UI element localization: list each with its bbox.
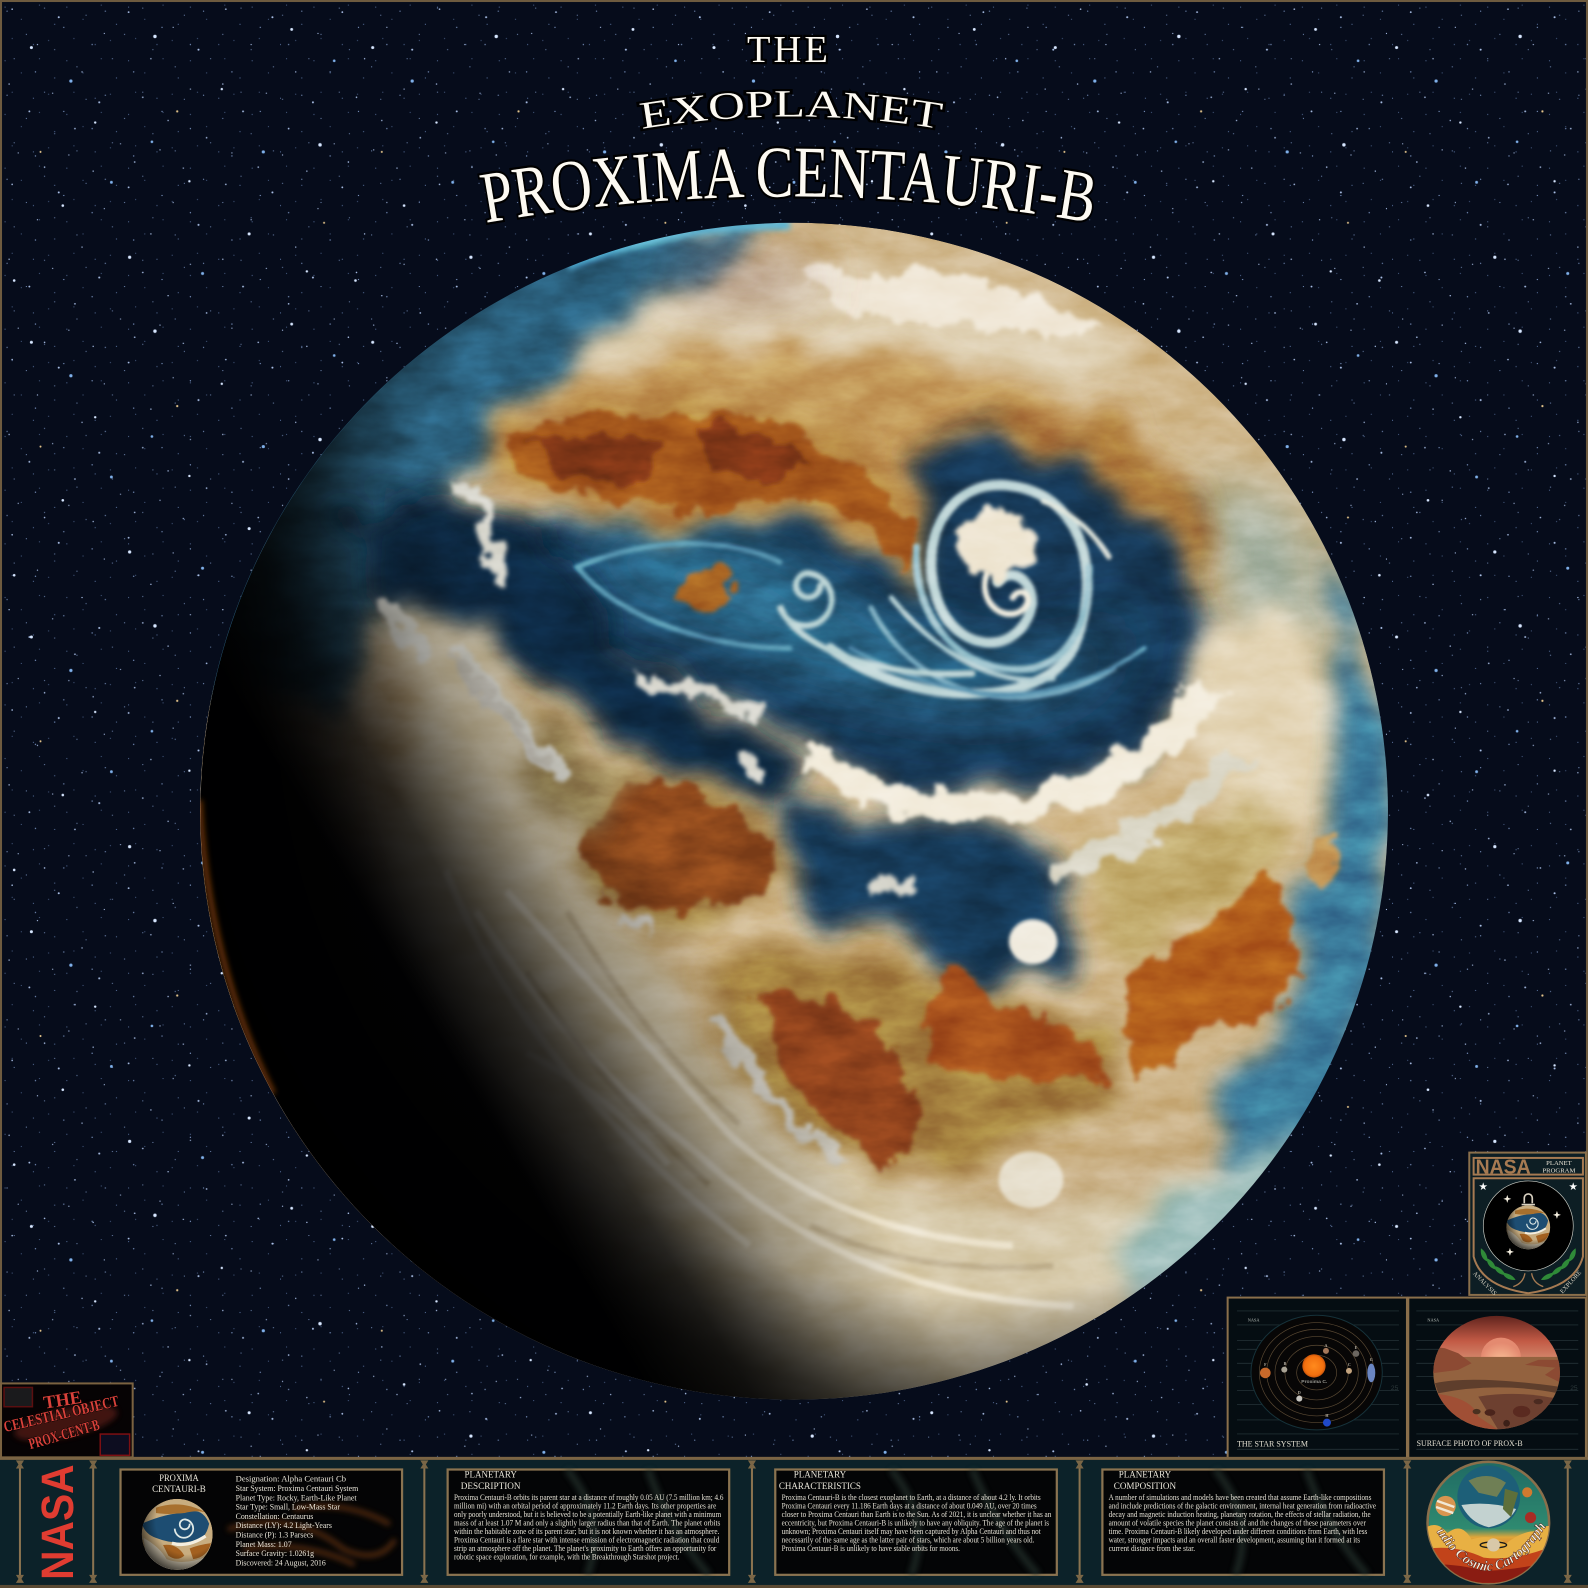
badge astronaut xyxy=(1522,1194,1535,1205)
title: THE: THE xyxy=(747,29,831,71)
panel: planetary composition xyxy=(1102,1470,1384,1575)
composition heading: COMPOSITION xyxy=(1114,1481,1176,1492)
mission badge: ★ xyxy=(1568,1182,1578,1193)
planet: east land xyxy=(1124,871,1298,1084)
panel: planetary characteristics xyxy=(775,1470,1057,1575)
celestial heading: THE xyxy=(42,1387,83,1413)
badge ANALYSIS: ANALYSIS xyxy=(1471,1270,1498,1297)
badge ribbon xyxy=(1513,1273,1543,1287)
description body: strip an atmosphere off the planet. The planet's proximity to Earth offers an opportunity for xyxy=(454,1544,717,1553)
planets A-H: G xyxy=(1370,1357,1373,1362)
composition body: and include predictions of the galactic environment, internal heat generation from radioactive xyxy=(1109,1501,1376,1510)
planet: western cloud islands xyxy=(380,486,922,891)
planets A-H: B xyxy=(1284,1361,1287,1366)
summary facts: Planet Mass: 1.07 xyxy=(236,1540,292,1549)
planet: right cream cloud mass xyxy=(1195,617,1349,841)
panel: planetary description xyxy=(448,1470,729,1575)
planet: polar white clouds xyxy=(800,269,1104,334)
emblem red planet xyxy=(1525,1512,1536,1523)
planet: rose haze xyxy=(679,263,810,291)
planet: night-side shadow xyxy=(201,223,1387,1400)
emblem lettering: Studio Cosmic Cartographic xyxy=(1436,1523,1546,1572)
planet: south rust land xyxy=(760,995,917,1165)
planet: rust land north xyxy=(501,413,917,572)
description body xyxy=(454,1493,723,1561)
planet: north-east coast xyxy=(911,415,1215,582)
planet: east land yellow fringe xyxy=(1088,800,1281,962)
characteristics body: Proxima Centauri every 11.186 Earth days at a distance of about 0.049 AU, over 20 times xyxy=(782,1501,1037,1510)
surface scene xyxy=(1432,1315,1562,1430)
characteristics body: Proxima Centauri-B is the closest exoplanet to Earth, at a distance of about 4.2 ly. It orbits xyxy=(782,1493,1041,1502)
description body: robotic space exploration, for example, with the Breakthrough Starshot project. xyxy=(454,1552,679,1561)
celestial heading: CELESTIAL OBJECT xyxy=(2,1393,121,1436)
summary heading: PROXIMA xyxy=(159,1473,199,1484)
composition body: time. Proxima Centauri-B likely developed under different conditions from Earth, with less xyxy=(1109,1527,1367,1536)
characteristics swirl xyxy=(891,1470,1038,1575)
planet: dark rust north xyxy=(527,425,810,482)
composition body: current distance from the star. xyxy=(1109,1544,1195,1553)
planet: upper right grey-blue haze xyxy=(1195,476,1337,648)
badge shield outline xyxy=(1474,1178,1583,1293)
panel: star system xyxy=(1228,1298,1407,1459)
celestial heading: PROX-CENT-B xyxy=(27,1417,102,1453)
badge program text: PROGRAM xyxy=(1542,1167,1575,1174)
planet: upper pale haze xyxy=(577,265,1134,405)
composition body: amount of volatile species the planet consists of and the changes of these parameters over xyxy=(1109,1518,1366,1527)
celestial object label xyxy=(1,1383,133,1457)
planet: small island xyxy=(678,567,730,612)
planet: bottom-right pale sea xyxy=(1104,1134,1306,1337)
planet: storm cap xyxy=(958,507,1031,576)
panel: surface photo xyxy=(1408,1298,1586,1459)
summary facts: Star Type: Small, Low-Mass Star xyxy=(236,1503,340,1512)
sun label: Proxima C. xyxy=(1301,1379,1328,1385)
planet: secondary cloud band xyxy=(1053,755,1241,871)
surface page number: 25 xyxy=(1570,1385,1578,1392)
bottom-right inset xyxy=(100,1434,130,1455)
composition body: A number of simulations and models have been created that assume Earth-like compositions xyxy=(1109,1493,1371,1502)
planets A-H: E xyxy=(1355,1345,1358,1350)
characteristics body xyxy=(782,1493,1051,1553)
description heading: DESCRIPTION xyxy=(461,1481,521,1492)
planets A-H: A xyxy=(1325,1343,1328,1348)
emblem small planet xyxy=(1522,1487,1532,1497)
summary facts: Distance (P): 1.3 Parsecs xyxy=(236,1531,313,1540)
title xyxy=(477,29,1094,225)
composition heading: PLANETARY xyxy=(1119,1470,1171,1481)
characteristics heading: PLANETARY xyxy=(794,1470,846,1481)
description body: Proxima Centauri is a flare star with intense emission of electromagnetic radiation that could xyxy=(454,1535,719,1544)
badge stars: ★ xyxy=(1478,1182,1488,1193)
title: EXOPLANET: EXOPLANET xyxy=(636,88,946,132)
composition body: water, stronger impacts and an overall faster development, assuming that it formed at its xyxy=(1109,1535,1360,1544)
description body: only poorly understood, but it is believed to be a potentially Earth-like planet with a minimum xyxy=(454,1510,722,1519)
surface caption: SURFACE PHOTO OF PROX-B xyxy=(1417,1439,1523,1448)
planets A-H: D xyxy=(1298,1390,1301,1395)
description body: within the habitable zone of its parent star; but it is not known whether it has an atmosphere. xyxy=(454,1527,719,1536)
description swirl xyxy=(567,1470,709,1575)
planet: lighter ocean swirl tone xyxy=(567,527,1134,709)
planet: main spiral storm xyxy=(577,485,1144,698)
planet: south cloud puff xyxy=(1009,920,1057,964)
planet: mottled texture xyxy=(201,223,1387,1400)
planet: orange rim glow xyxy=(200,800,273,1094)
summary facts: Distance (LY): 4.2 Light-Years xyxy=(236,1521,332,1530)
description heading: PLANETARY xyxy=(465,1470,517,1481)
planet: mountain clouds xyxy=(456,658,841,1165)
badge laurels xyxy=(1481,1248,1576,1280)
planet: golden desert band xyxy=(527,346,1236,587)
emblem ringed planet xyxy=(1480,1538,1507,1552)
description body: Proxima Centauri-B orbits its parent star at a distance of roughly 0.05 AU (7.5 million km; 4.6 xyxy=(454,1493,723,1502)
badge black disc xyxy=(1483,1181,1573,1271)
NASA logo: NASA xyxy=(32,1464,83,1580)
planet: southern swirl streaks xyxy=(446,871,1074,1306)
summary facts xyxy=(236,1475,359,1568)
composition body: decay and magnetic induction heating, planetary rotation, the effects of stellar radiation, the xyxy=(1109,1510,1371,1519)
planet: lower left cream swath xyxy=(344,598,1317,1418)
star system small header: NASA xyxy=(1248,1318,1260,1323)
planets A-H: F xyxy=(1264,1362,1267,1367)
planet: bright limb highlight xyxy=(567,225,790,265)
planet: south storm cloud xyxy=(999,1152,1063,1208)
panel: planet summary: CENTAURI-B xyxy=(152,1484,206,1495)
composition swirl xyxy=(1215,1470,1367,1575)
title: PROXIMA CENTAURI-B: PROXIMA CENTAURI-B xyxy=(477,146,1094,225)
badge NASA wordmark: NASA xyxy=(1476,1155,1531,1178)
planet: south-center rust land xyxy=(927,962,1104,1082)
characteristics body: closer to Proxima Centauri than Earth is to the Sun. As of 2021, it is unclear whether it has an xyxy=(782,1510,1051,1519)
planet: small vortex xyxy=(780,573,972,674)
emblem earth xyxy=(1457,1465,1520,1528)
planets A-H: C xyxy=(1348,1362,1351,1367)
top-left inset xyxy=(4,1387,32,1407)
page number: 25 xyxy=(1391,1385,1399,1392)
surface small header: NASA xyxy=(1427,1318,1440,1323)
badge header xyxy=(1474,1155,1583,1178)
planet: left ocean dark xyxy=(334,486,810,810)
celestial heading xyxy=(2,1387,121,1453)
planet globe xyxy=(172,208,1390,1418)
badge EXPLORE: EXPLORE xyxy=(1559,1269,1583,1295)
planet: olive land base south xyxy=(709,952,1114,1165)
planet: limb darkening xyxy=(201,223,1387,1400)
summary facts: Star System: Proxima Centauri System xyxy=(236,1484,359,1493)
summary facts: Discovered: 24 August, 2016 xyxy=(236,1559,326,1568)
orbit disc xyxy=(1251,1315,1382,1430)
planets A-H: H xyxy=(1325,1413,1329,1418)
badge planet xyxy=(1506,1205,1550,1253)
panel: planet summary xyxy=(121,1470,402,1575)
summary nebula xyxy=(228,1506,395,1565)
planet: small eastern island xyxy=(1309,835,1338,883)
planet: blue upper-left limb xyxy=(172,208,770,709)
planet: central rust land xyxy=(582,782,780,911)
characteristics body: necessarily of the same age as the latter pair of stars, which are about 5 billion years old. xyxy=(782,1535,1034,1544)
description body: mass of at least 1.07 M and only a slightly larger radius than that of Earth. The planet orbits xyxy=(454,1518,720,1527)
caption: THE STAR SYSTEM xyxy=(1237,1440,1308,1449)
surface terrain xyxy=(1432,1357,1562,1430)
summary facts: Constellation: Centaurus xyxy=(236,1512,313,1521)
summary facts: Planet Type: Rocky, Earth-Like Planet xyxy=(236,1493,357,1502)
characteristics body: eccentricity, but Proxima Centauri-B is unlikely to have any obliquity. The age of the planet is xyxy=(782,1518,1049,1527)
planet: deep ocean xyxy=(375,425,1220,800)
planet: olive shore west xyxy=(527,699,648,851)
description body: million mi) with an orbital period of approximately 11.2 Earth days. Its other properties are xyxy=(454,1501,717,1510)
sun xyxy=(1302,1354,1326,1378)
surface sun xyxy=(1481,1338,1521,1378)
planet: right blue limb xyxy=(1205,537,1390,1195)
characteristics heading: CHARACTERISTICS xyxy=(779,1481,861,1492)
planet: central land fringe xyxy=(567,772,795,927)
badge sparkles xyxy=(1503,1195,1561,1256)
summary facts: Designation: Alpha Centauri Cb xyxy=(236,1475,346,1484)
planet: rust land fringe north xyxy=(486,403,932,582)
emblem banded planet xyxy=(1435,1496,1456,1516)
planet: southern brown streaks xyxy=(527,911,1053,1268)
mission badge xyxy=(1469,1153,1586,1297)
summary planet xyxy=(142,1499,213,1575)
characteristics body: Proxima Centauri-B is unlikely to have stable orbits for moons. xyxy=(782,1544,960,1553)
planet: cloud band xyxy=(810,689,1210,808)
planet: lower ocean xyxy=(780,790,1074,992)
summary facts: Surface Gravity: 1.0261g xyxy=(236,1549,315,1558)
planets A-H xyxy=(1260,1343,1375,1427)
galaxy glow xyxy=(11,1398,120,1448)
badge program text: PLANET xyxy=(1546,1160,1572,1167)
emblem clouds xyxy=(1423,1525,1560,1583)
characteristics body: unknown; Proxima Centauri itself may have been captured by Alpha Centauri and thus not xyxy=(782,1527,1041,1536)
composition body xyxy=(1109,1493,1376,1553)
